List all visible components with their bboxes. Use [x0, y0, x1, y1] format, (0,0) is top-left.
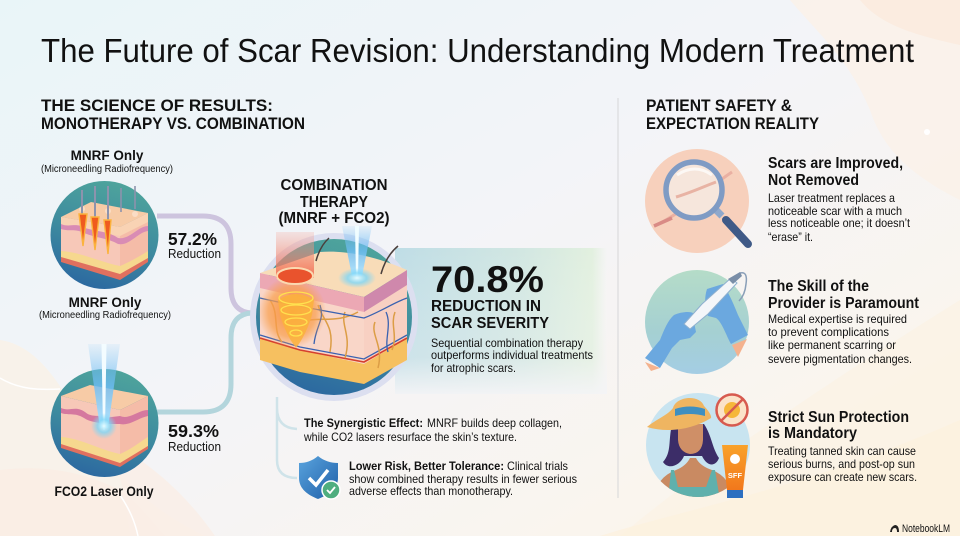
- label: MNRF only second: MNRF Only: [69, 295, 142, 310]
- stat: 70.8% reduction: [431, 258, 550, 332]
- text: sequential therapy: Sequential combination therapy: [431, 336, 583, 350]
- text: scars are improved: Not Removed: [768, 172, 859, 189]
- text: lower risk: Clinical trials: [507, 459, 568, 473]
- text: sequential therapy: outperforms individual treatments: [431, 348, 593, 362]
- heading: combination therapy: [278, 177, 390, 227]
- heading: patient safety: EXPECTATION REALITY: [646, 115, 819, 133]
- text: sun protection: exposure can create new scars.: [768, 470, 917, 484]
- stat: 59.3%: 59.3%: [168, 421, 219, 441]
- stat: 59.3%: [168, 421, 221, 454]
- text: skill of the provider: to prevent complications: [768, 325, 889, 339]
- text: sun protection: is Mandatory: [768, 425, 857, 442]
- text: scars are improved: Laser treatment replaces a: [768, 191, 895, 205]
- text: lower risk: Lower Risk, Better Tolerance:: [349, 459, 504, 473]
- label: MNRF only top: (Microneedling Radiofrequency): [41, 164, 173, 175]
- text: skill of the provider: Medical expertise is required: [768, 312, 907, 326]
- label: MNRF only top: [41, 148, 173, 175]
- text: skill of the provider: The Skill of the: [768, 278, 869, 295]
- heading: combination therapy: (MNRF + FCO2): [278, 210, 390, 227]
- label: MNRF only second: (Microneedling Radiofrequency): [39, 310, 171, 321]
- heading: patient safety: [646, 97, 819, 133]
- label: MNRF only second: [39, 295, 171, 321]
- stat: 70.8% reduction: REDUCTION IN: [431, 298, 541, 315]
- icon: combination skin cross-section: [250, 226, 418, 401]
- text: scars are improved: Scars are Improved,: [768, 155, 903, 172]
- label: FCO2 laser only: FCO2 Laser Only: [54, 484, 154, 499]
- text: lower risk: [349, 459, 577, 498]
- icon: gloved hands with device: [645, 270, 749, 374]
- icon: magnifying glass: [645, 149, 749, 253]
- text: synergistic effect: [303, 416, 562, 444]
- text: scars are improved: [768, 155, 911, 244]
- stat: 70.8% reduction: SCAR SEVERITY: [431, 315, 550, 332]
- text: synergistic effect: MNRF builds deep collagen,: [427, 416, 562, 430]
- text: sun protection: [768, 409, 917, 484]
- stat: 57.2%: Reduction: [168, 246, 221, 261]
- connector: FCO2 to combination: [157, 313, 252, 412]
- divider: [617, 98, 619, 498]
- heading: patient safety: PATIENT SAFETY &: [646, 97, 792, 115]
- text: sequential therapy: [431, 336, 593, 375]
- stat: 59.3%: Reduction: [168, 439, 221, 454]
- text: sequential therapy: for atrophic scars.: [431, 361, 516, 375]
- text: skill of the provider: Provider is Paramount: [768, 295, 919, 312]
- text: lower risk: adverse effects than monotherapy.: [349, 484, 513, 498]
- text: lower risk: show combined therapy results in fewer serious: [349, 472, 577, 486]
- connector tree: [277, 397, 297, 478]
- stat: 70.8% reduction: 70.8%: [431, 258, 544, 300]
- icon: sun protection woman: [646, 393, 750, 500]
- icon: MNRF skin cross-section: [50, 181, 158, 289]
- stat: 57.2%: [168, 229, 221, 261]
- heading: combination therapy: COMBINATION: [280, 177, 388, 194]
- heading: science of results: MONOTHERAPY VS. COMBINATION: [41, 115, 305, 133]
- text: sun protection: Strict Sun Protection: [768, 409, 909, 426]
- text: skill of the provider: [768, 278, 919, 366]
- title: The Future of Scar Revision: Understanding Modern Treatment: [41, 33, 915, 70]
- icon: FCO2 skin cross-section: [50, 344, 158, 477]
- text: synergistic effect: The Synergistic Effect:: [304, 416, 423, 430]
- text: scars are improved: less noticeable one; it doesn’t: [768, 216, 911, 230]
- heading: combination therapy: THERAPY: [300, 194, 369, 211]
- icon: shield: [299, 456, 340, 499]
- label: MNRF only top: MNRF Only: [71, 148, 144, 163]
- text: sun protection: serious burns, and post-op sun: [768, 457, 915, 471]
- text: scars are improved: noticeable scar with a much: [768, 204, 902, 218]
- icon: sun protection woman: SFF: [728, 471, 742, 480]
- text: synergistic effect: while CO2 lasers resurface the skin’s texture.: [303, 430, 517, 444]
- panel: result highlight: [395, 248, 607, 394]
- text: skill of the provider: severe pigmentation changes.: [768, 352, 912, 366]
- text: scars are improved: “erase” it.: [768, 230, 813, 244]
- connector: MNRF to combination: [157, 216, 252, 313]
- stat: 57.2%: 57.2%: [168, 229, 217, 249]
- text: sun protection: Treating tanned skin can cause: [768, 444, 916, 458]
- heading: science of results: [41, 97, 305, 133]
- text: skill of the provider: like permanent scarring or: [768, 338, 896, 352]
- logo: NotebookLM: [890, 523, 950, 535]
- heading: science of results: THE SCIENCE OF RESULTS:: [41, 97, 273, 115]
